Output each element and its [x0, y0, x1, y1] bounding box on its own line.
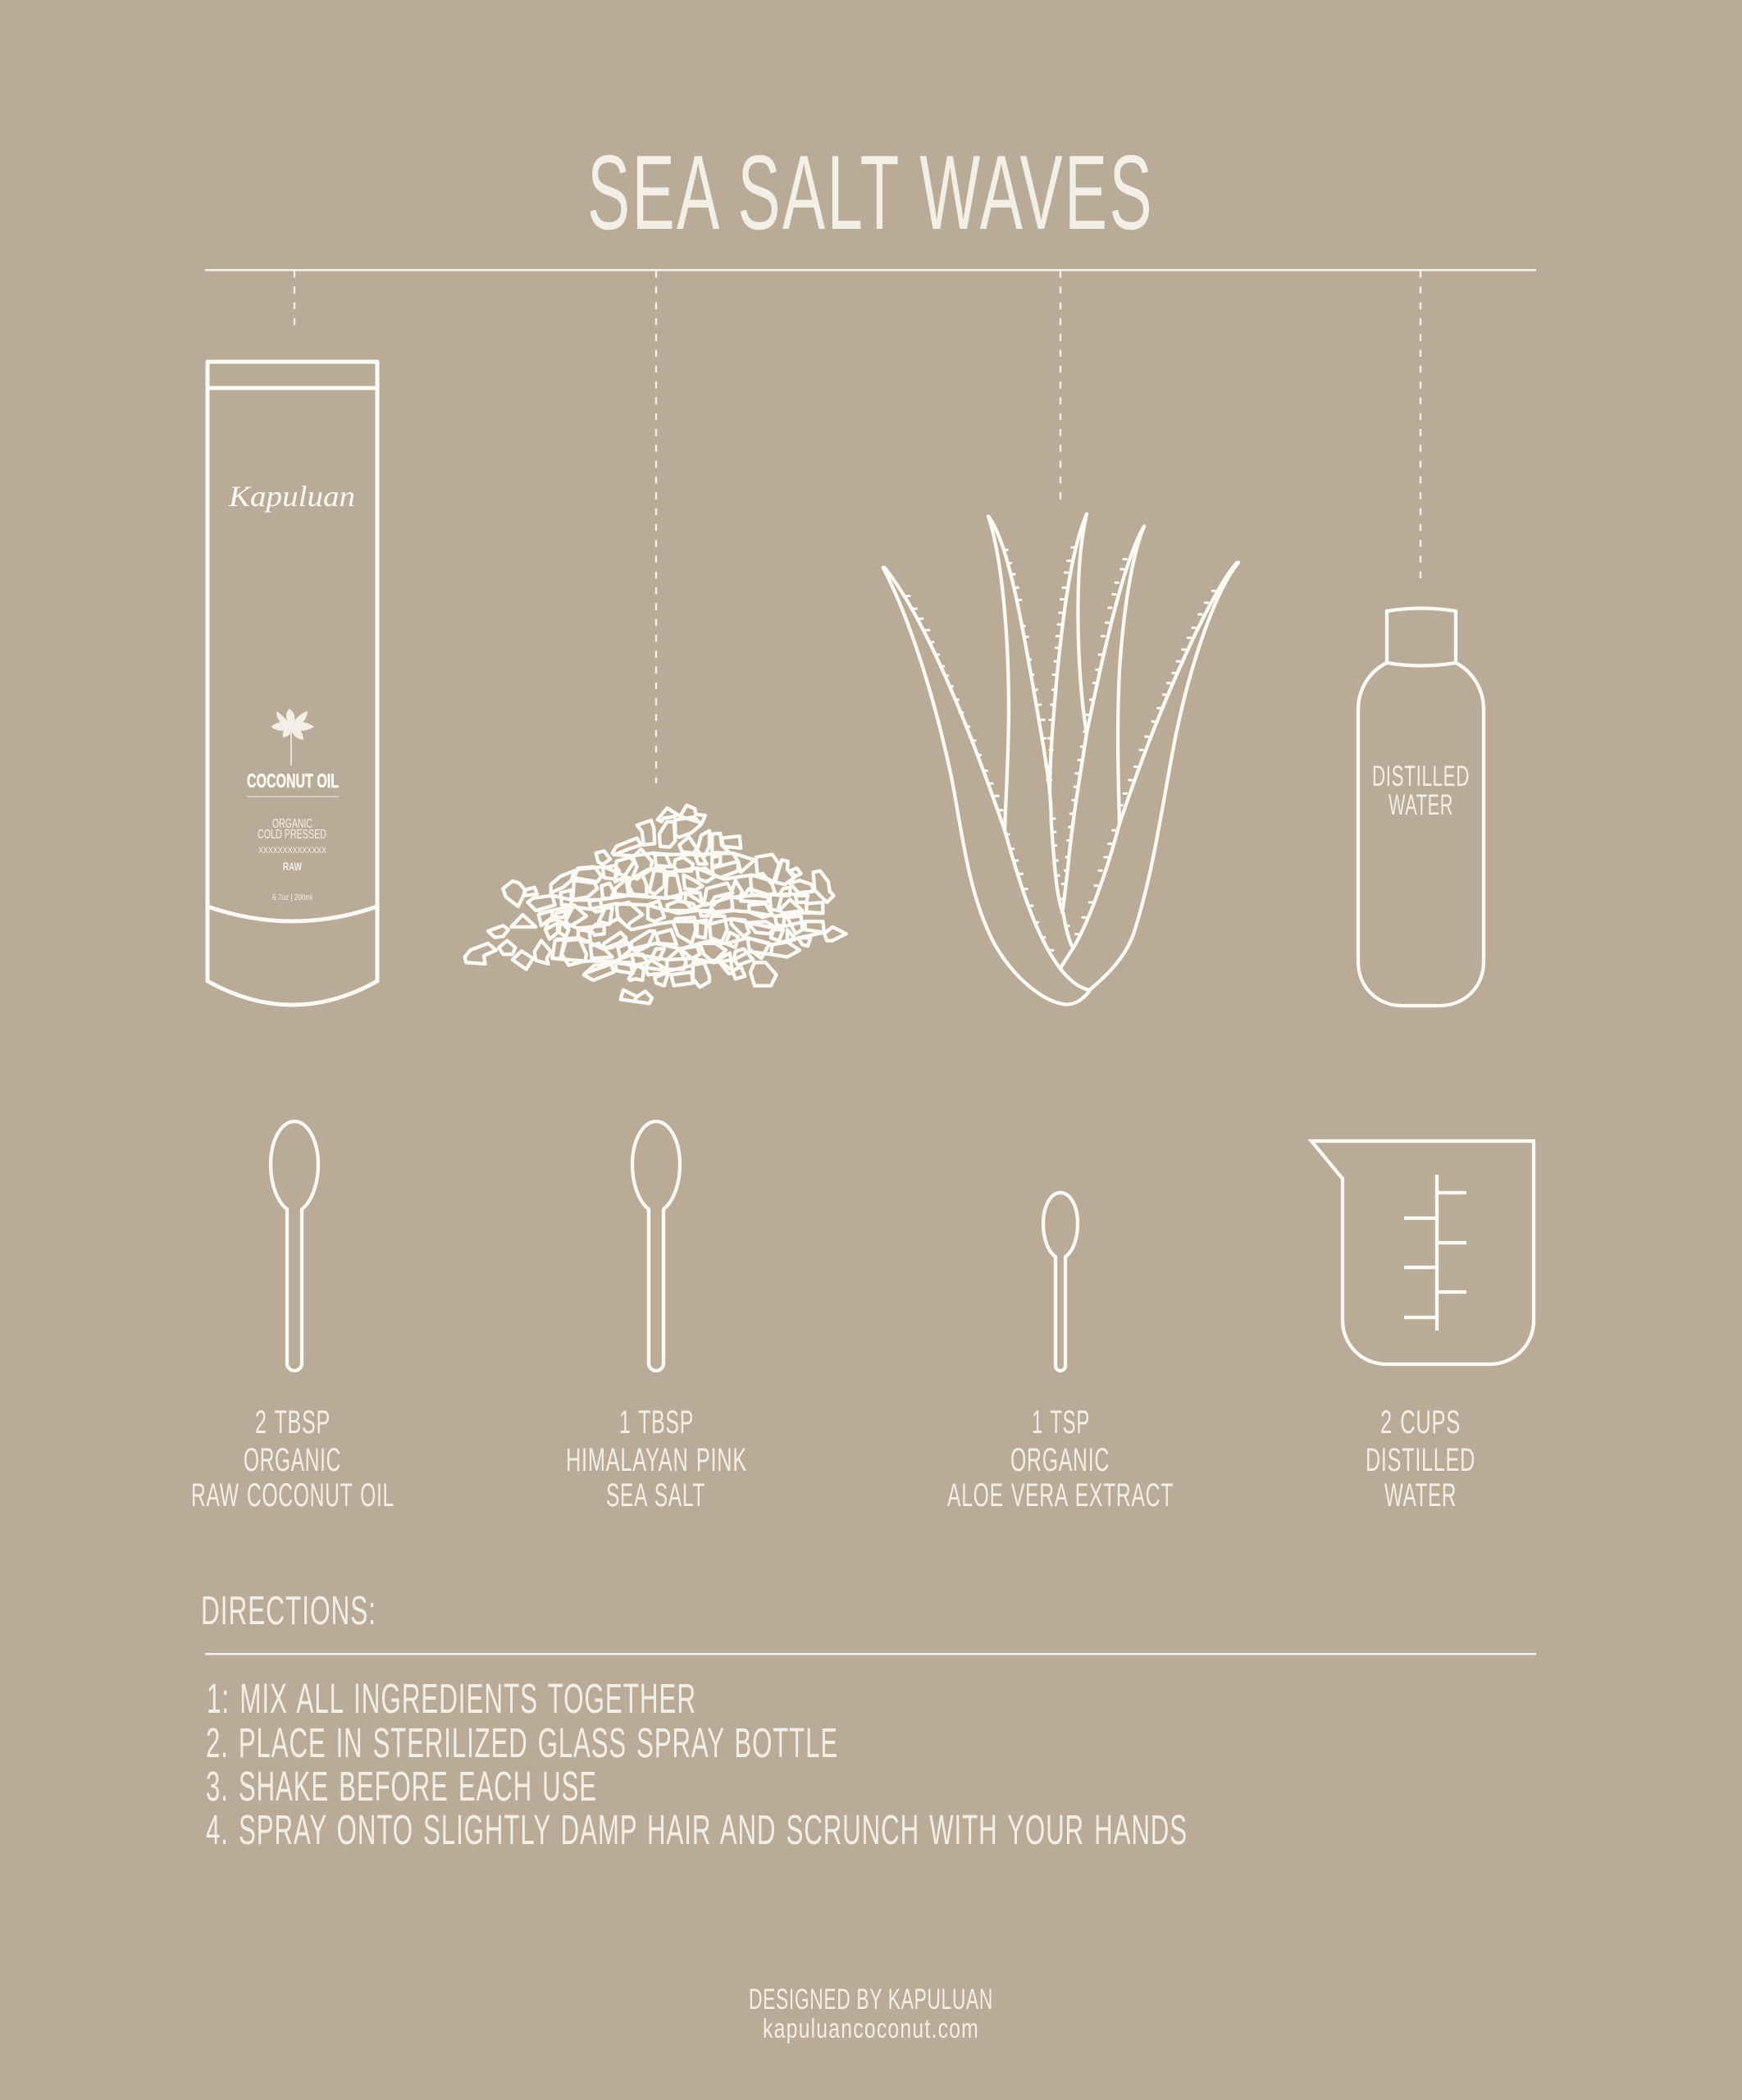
title: SEA SALT WAVES [587, 134, 1154, 252]
directions list: 3. SHAKE BEFORE EACH USE [206, 1763, 597, 1810]
ingredient label: water: 2 CUPS [1380, 1404, 1461, 1440]
right outer leaf [1089, 563, 1238, 990]
bottle body [1358, 663, 1484, 1006]
dashed connector: sea salt [655, 271, 657, 783]
ingredient label: sea salt: HIMALAYAN PINK [566, 1442, 747, 1478]
icon: coconut oil tube [207, 362, 377, 1005]
icon: coconut oil tube: RAW [283, 860, 303, 873]
footer credit: DESIGNED BY KAPULUAN [749, 1984, 993, 2016]
ingredient label: sea salt: SEA SALT [606, 1477, 705, 1513]
ingredient label: sea salt: 1 TBSP [619, 1404, 694, 1440]
center leaf [1050, 514, 1087, 793]
icon: aloe vera plant [883, 514, 1238, 1004]
dashed connector: coconut oil [294, 271, 295, 326]
ingredient label: coconut oil: ORGANIC [244, 1442, 341, 1478]
icon: palm tree [271, 709, 314, 765]
tube outline [207, 362, 377, 1005]
brand script: Kapuluan [228, 480, 355, 513]
dashed connector: water bottle [1420, 271, 1421, 578]
product name: COCONUT OIL [247, 770, 339, 792]
ingredient label: water [1366, 1404, 1475, 1513]
icon: pile of sea salt [465, 806, 846, 1003]
icon: coconut oil tube: 6.7oz | 200ml [272, 892, 312, 902]
product descriptors: ORGANIC [272, 817, 312, 831]
ingredient label: aloe vera [947, 1404, 1174, 1513]
ingredient label: coconut oil: RAW COCONUT OIL [191, 1477, 394, 1513]
ingredient label: water: WATER [1384, 1477, 1457, 1513]
icon: coconut oil tube: XXXXXXXXXXXXXX [258, 846, 327, 856]
icon: tablespoon 2 [632, 1121, 680, 1371]
icon: teaspoon [1043, 1193, 1078, 1371]
bottle label: DISTILLED [1372, 760, 1470, 792]
inner right leaf [1062, 527, 1144, 912]
ingredient label: water: DISTILLED [1366, 1442, 1475, 1478]
icon: distilled water bottle: WATER [1389, 789, 1453, 821]
icon: coconut oil tube: COLD PRESSED [258, 828, 326, 842]
icon: tablespoon 1 [271, 1121, 318, 1371]
ingredient label: coconut oil: 2 TBSP [255, 1404, 331, 1440]
tube lower curve [207, 906, 377, 921]
ingredient label: coconut oil [191, 1404, 394, 1513]
left outer leaf [883, 568, 1089, 1004]
footer credit [749, 1984, 993, 2043]
tube top band [207, 386, 377, 390]
directions list: 1: MIX ALL INGREDIENTS TOGETHER [207, 1675, 696, 1722]
ingredient label: sea salt [566, 1404, 747, 1513]
ingredient label: aloe vera: ORGANIC [1010, 1442, 1110, 1478]
bottle cap [1387, 609, 1456, 666]
inner left leaf [988, 516, 1009, 830]
icon: measuring cup [1311, 1141, 1534, 1364]
footer credit: kapuluancoconut.com [763, 2013, 979, 2043]
icon: distilled water bottle [1358, 609, 1484, 1006]
ingredient label: aloe vera: 1 TSP [1032, 1404, 1090, 1440]
leaf spines [906, 547, 1215, 950]
dashed connector: aloe vera [1060, 271, 1061, 500]
directions list [206, 1675, 1188, 1853]
directions heading: DIRECTIONS: [201, 1589, 376, 1633]
ingredient label: aloe vera: ALOE VERA EXTRACT [947, 1477, 1174, 1513]
directions list: 2. PLACE IN STERILIZED GLASS SPRAY BOTTLE [206, 1719, 838, 1766]
